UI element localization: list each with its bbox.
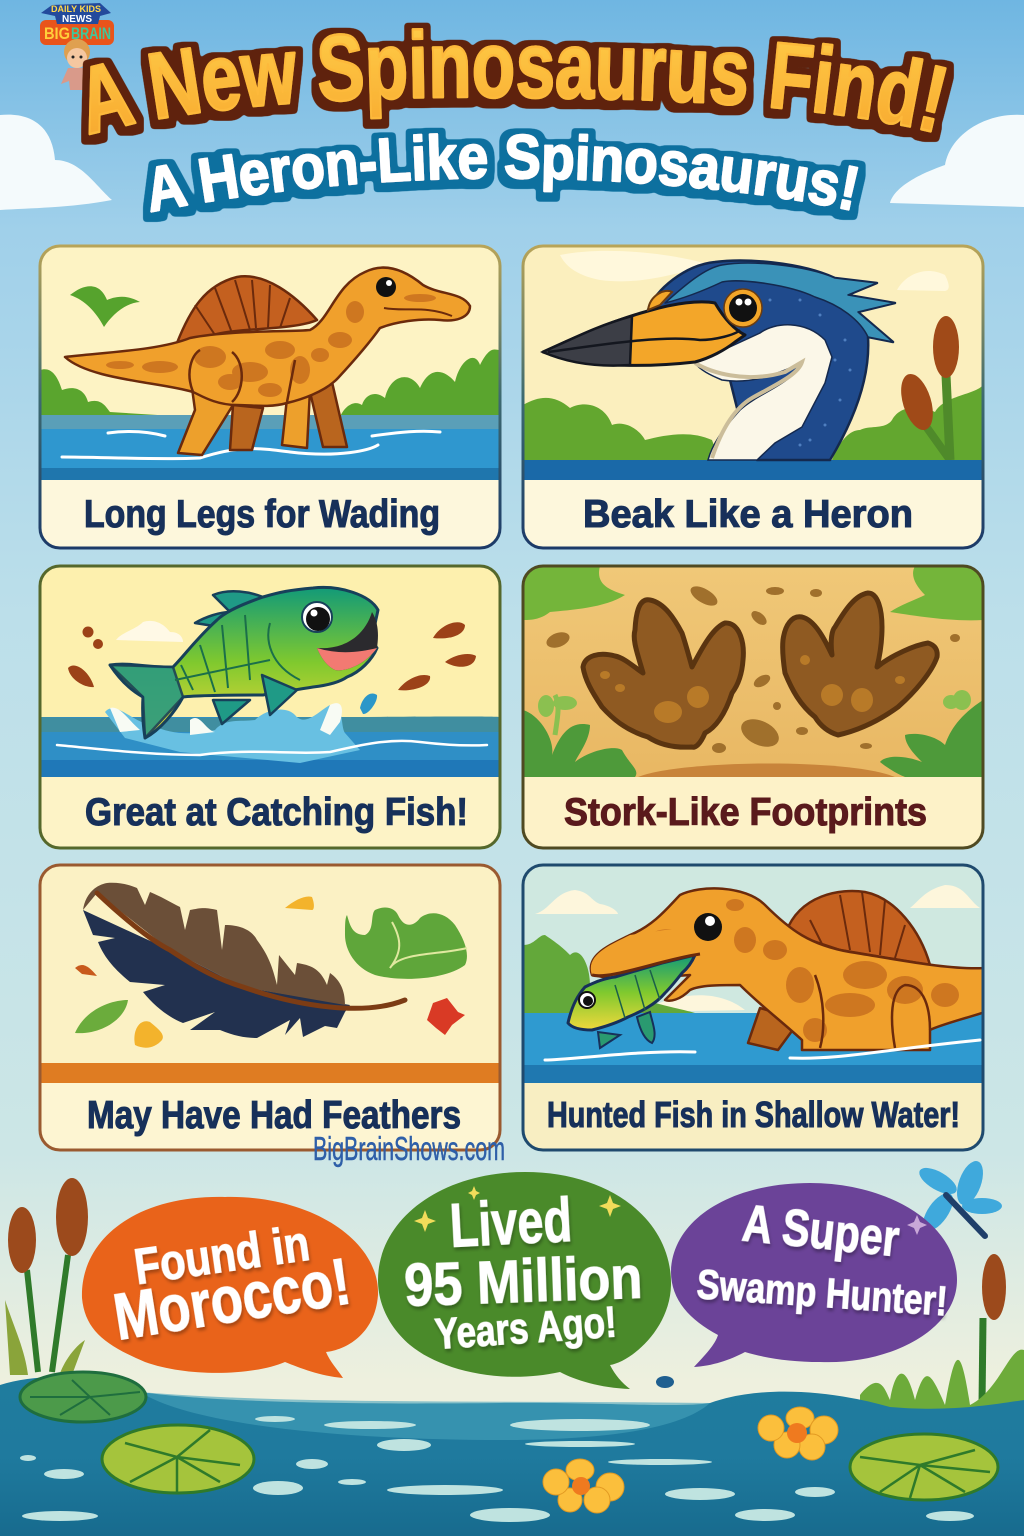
caption background [523, 777, 983, 848]
fins [195, 591, 263, 627]
panel: stork-like footprints [523, 566, 985, 848]
dinosaur [591, 888, 985, 1050]
cloud right [890, 115, 1024, 207]
callout: a super swamp hunter: A Super [740, 1194, 902, 1268]
caption background [40, 480, 500, 548]
feather upper vane [83, 883, 345, 1005]
right cattail and reeds [860, 1254, 1024, 1410]
panel: catching fish [40, 566, 500, 848]
spots on neck [768, 298, 852, 446]
logo: Daily Kids News Big Brain [40, 3, 114, 90]
green leaf [345, 908, 467, 979]
panel: long legs for wading [40, 246, 500, 548]
eye [694, 913, 722, 941]
upper jaw over fish [591, 925, 708, 975]
caption background [40, 1083, 500, 1150]
callout: lived 95 million years ago: 95 Million [403, 1244, 643, 1319]
bushes [40, 349, 500, 417]
title: A New Spinosaurus Find! [81, 22, 954, 145]
panel: beak like a heron [523, 246, 983, 548]
callout: found in Morocco [82, 1197, 378, 1378]
eye [376, 277, 396, 297]
subtitle: A Heron-Like Spinosaurus! [142, 128, 866, 222]
bushes [523, 935, 695, 1013]
water [42, 429, 498, 468]
callout: a super swamp hunter [671, 1183, 957, 1367]
splash [105, 705, 360, 763]
dot [656, 1376, 674, 1388]
fish in mouth [598, 1012, 655, 1048]
caption background [523, 480, 983, 548]
mouth [317, 612, 378, 670]
pebbles [544, 582, 960, 753]
plants [523, 566, 983, 620]
near legs [178, 388, 310, 455]
icon: green leaf [70, 286, 140, 327]
cloud left [0, 115, 112, 210]
sail [177, 276, 317, 343]
caption background [523, 1083, 983, 1150]
icon: dragonfly [915, 1158, 1002, 1236]
icon: lily pads [20, 1372, 998, 1500]
icon: yellow flowers [543, 1407, 838, 1513]
spots [106, 294, 436, 397]
caption: May Have Had Feathers [87, 1094, 461, 1137]
fish body [110, 587, 378, 738]
logo: Daily Kids News Big Brain: BIG [44, 24, 70, 43]
callout: found in Morocco: Morocco! [109, 1244, 355, 1354]
bushes [523, 385, 983, 462]
watermark: BigBrainShows.com [313, 1130, 505, 1167]
feather lower vane [83, 910, 350, 1038]
right footprint [783, 593, 937, 735]
panel: feathers [40, 865, 500, 1150]
fish [110, 587, 378, 738]
panel: hunted fish [523, 865, 985, 1150]
left footprint [583, 600, 743, 747]
beak [543, 302, 745, 365]
small leaves [75, 1000, 128, 1033]
caption: Great at Catching Fish! [85, 791, 468, 834]
callout: lived 95 million years ago [378, 1172, 671, 1389]
back legs [230, 382, 347, 450]
sail [786, 891, 930, 965]
logo: Daily Kids News Big Brain: NEWS [62, 14, 92, 25]
eye [724, 289, 762, 327]
feather shaft [97, 893, 405, 1008]
splashes of mud [68, 622, 476, 690]
eye [302, 602, 332, 632]
caption: Long Legs for Wading [84, 493, 440, 536]
water [523, 1013, 983, 1083]
spots [652, 899, 959, 1042]
scale lines [175, 615, 300, 692]
water ripples [545, 1040, 980, 1060]
caption: Beak Like a Heron [583, 493, 913, 536]
caption background [40, 777, 500, 848]
heron neck and head [648, 261, 895, 460]
logo: Daily Kids News Big Brain: DAILY KIDS [51, 4, 101, 14]
callout: a super swamp hunter: Swamp Hunter! [695, 1260, 949, 1324]
water strip [523, 460, 983, 480]
callout: lived 95 million years ago: Years Ago! [433, 1297, 618, 1359]
logo: Daily Kids News Big Brain: BRAIN [71, 24, 111, 43]
water [42, 717, 498, 760]
callout: lived 95 million years ago: Lived [448, 1186, 574, 1261]
cattails [895, 316, 959, 460]
far leg [748, 1008, 800, 1050]
dinosaur body [65, 268, 470, 406]
pond [0, 1377, 1024, 1536]
callout: found in Morocco: Found in [131, 1215, 313, 1295]
crown [665, 263, 895, 342]
left cattails [5, 1178, 88, 1380]
caption: Stork-Like Footprints [564, 791, 927, 834]
white throat [695, 325, 832, 460]
